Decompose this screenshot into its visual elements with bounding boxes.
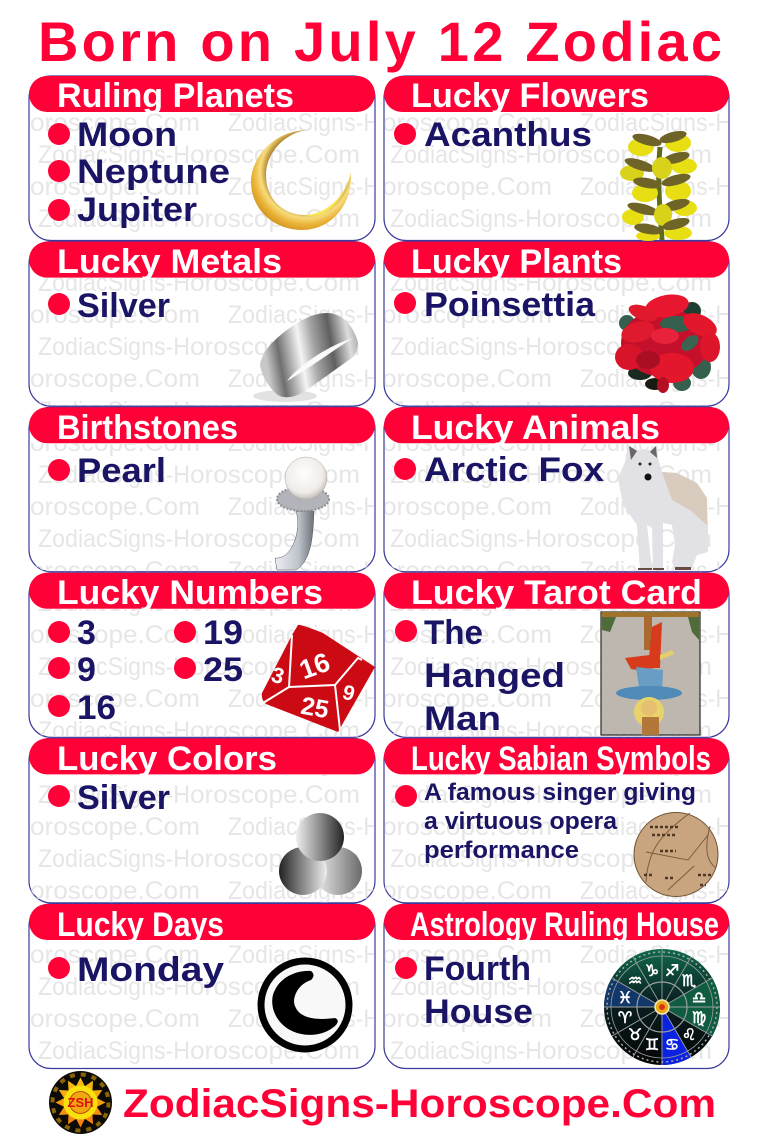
icon: zodiac house wheel: ♓︎ [618,990,632,1007]
panel: lucky numbers [29,573,375,737]
list: ruling planets: Neptune [77,153,230,191]
headings: Lucky Plants [411,243,622,281]
text: lucky flower: Acanthus [424,116,592,154]
text: tarot card: Hanged [424,657,565,695]
text: sabian symbol [424,779,696,864]
list: lucky numbers: 16 [77,689,116,727]
list: lucky numbers: 3 [77,614,96,652]
text: sabian symbol: performance [424,837,579,864]
text: tarot card: The [424,614,483,652]
panel: astrology ruling house [384,904,729,1068]
list: ruling planets: Jupiter [77,191,197,229]
panel: lucky animals [384,407,729,572]
icon: acanthus flower [620,129,697,241]
text: tarot card: Man [424,700,501,738]
icon: zodiac house wheel: ♏︎ [681,973,697,990]
icon: three silver circles [279,813,362,895]
icon: red polyhedral die: 9 [340,681,357,706]
icon: poinsettia [615,291,721,393]
list: lucky numbers: 19 [203,614,243,652]
text: lucky day: Monday [77,951,224,989]
headings: Lucky Flowers [411,77,649,115]
icon: zodiac house wheel: ♑︎ [645,963,659,980]
panel: lucky days [29,904,375,1068]
panel: lucky metals [29,242,375,406]
icon: zodiac house wheel: ♊︎ [645,1037,659,1054]
text: birthstone: Pearl [77,452,166,490]
text: ruling house [424,950,533,1031]
panel: lucky plants [384,242,729,406]
watermark [30,112,728,1068]
text: ruling house: House [424,993,533,1031]
list: lucky numbers: 9 [77,651,96,689]
icon: red polyhedral die: 3 [269,662,287,689]
icon: hanged man tarot card [601,612,700,735]
text: lucky color: Silver [77,779,170,817]
panel: lucky sabian symbols [384,738,729,903]
icon: silver ring [253,313,358,402]
text: sabian symbol: A famous singer giving [424,779,696,806]
headings [57,77,719,944]
headings: Lucky Animals [411,409,660,447]
footer logo [49,1071,112,1134]
icon: crescent moon in black ring [261,961,349,1049]
list: ruling planets [77,116,230,229]
icon: zodiac house wheel: ♐︎ [665,963,679,980]
headings: Birthstones [57,409,238,447]
panel: birthstones [29,407,375,572]
icon: zodiac house wheel [604,949,720,1065]
text: lucky plant: Poinsettia [424,286,596,324]
text: lucky metal: Silver [77,287,170,325]
icon: zodiac house wheel: ♌︎ [682,1027,696,1044]
text: ruling house: Fourth [424,950,531,988]
title: Born on July 12 Zodiac [38,10,722,73]
icon: red polyhedral die [262,625,375,732]
icon: zodiac house wheel: ♎︎ [692,990,706,1007]
headings: Lucky Colors [57,740,277,778]
list: ruling planets: Moon [77,116,177,154]
icon: red polyhedral die: 16 [295,647,334,685]
icon: astrology chart [634,812,718,896]
text: sabian symbol: a virtuous opera [424,808,618,835]
icon: zodiac house wheel: ♋︎ [665,1037,679,1054]
icon: red polyhedral die: 25 [299,692,331,724]
icon: zodiac house wheel: ♍︎ [692,1010,706,1027]
icon: zodiac house wheel: ♒︎ [628,973,642,990]
headings: Ruling Planets [57,77,294,115]
headings: Lucky Metals [57,243,282,281]
headings: Lucky Tarot Card [411,574,702,612]
icon: zodiac house wheel: ♉︎ [628,1027,642,1044]
headings: Lucky Numbers [57,574,323,612]
icon: golden crescent moon [251,130,351,230]
panel: lucky colors [29,738,375,903]
panel: lucky flowers [384,76,729,240]
list: lucky numbers [77,614,243,727]
icon: pearl ring [275,457,329,570]
footer logo: ZSH [68,1095,94,1110]
footer website: ZodiacSigns-Horoscope.Com [123,1082,716,1126]
icon: white arctic fox [618,445,708,570]
text: lucky animal: Arctic Fox [424,451,604,489]
headings: Lucky Days [57,906,224,944]
icon: zodiac house wheel: ♈︎ [618,1010,632,1027]
text: tarot card [424,614,565,738]
list: lucky numbers: 25 [203,651,243,689]
panel: ruling planets [29,76,375,240]
panel: lucky tarot card [384,573,729,737]
bullets [48,123,417,979]
